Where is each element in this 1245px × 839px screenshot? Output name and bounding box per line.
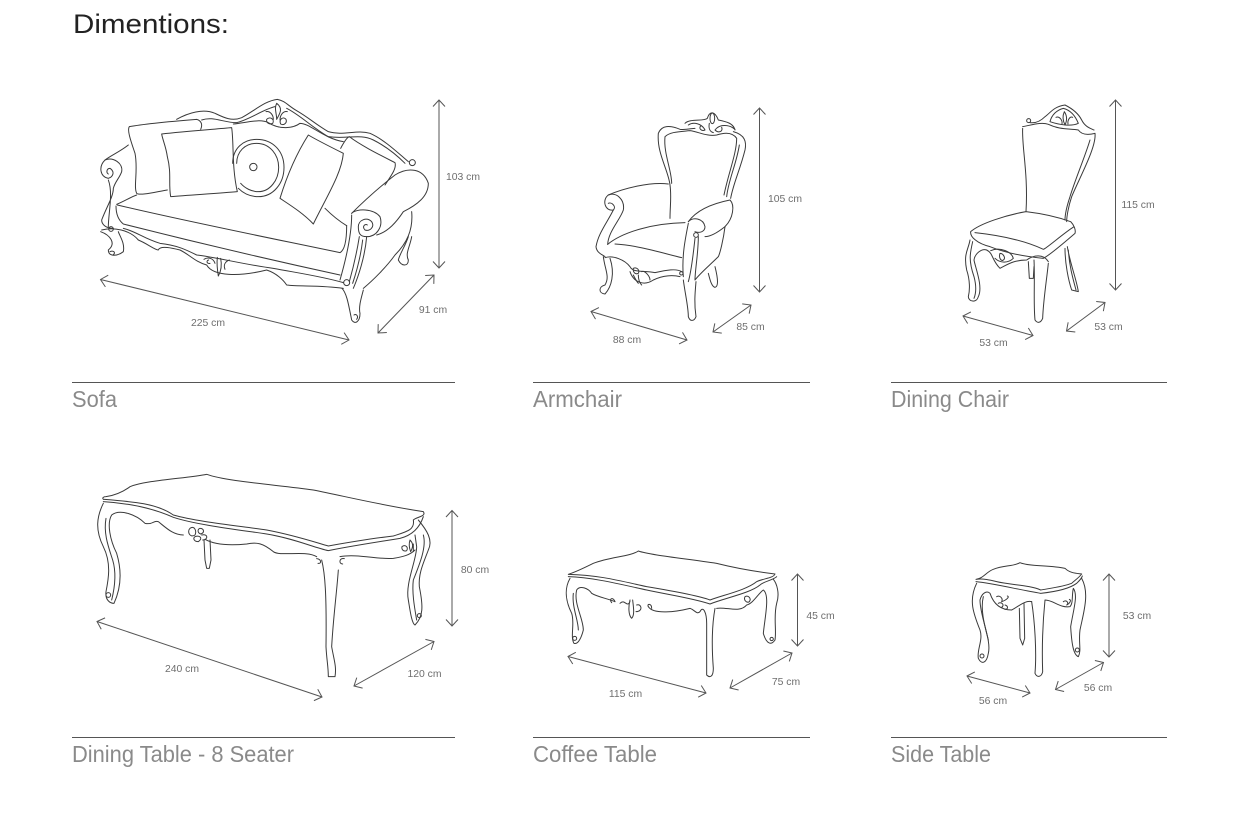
dimension: 53 cm: 53 cm: [1094, 322, 1123, 333]
dimension: 120 cm: 120 cm: [407, 669, 442, 680]
arrow: depth: [730, 653, 792, 688]
dimension: 105 cm: 105 cm: [768, 194, 802, 205]
arrow: width: [591, 312, 687, 340]
dimension: 53 cm: 53 cm: [979, 338, 1008, 349]
drawing: dining table: [98, 474, 430, 677]
title: Dimentions:: [73, 9, 229, 39]
divider and label: Armchair: Armchair: [533, 386, 622, 412]
arrow: depth: [378, 275, 434, 333]
arrow: height: [451, 510, 453, 626]
drawing: sofa: [101, 99, 428, 322]
panel: side table: [891, 563, 1167, 767]
arrow: depth: [713, 305, 751, 332]
dimension: 80 cm: 80 cm: [461, 565, 489, 576]
dimension: 115 cm: 115 cm: [1121, 200, 1155, 211]
dimension: 88 cm: 88 cm: [613, 335, 641, 346]
dimension: 56 cm: 56 cm: [1084, 683, 1112, 694]
arrow: height: [796, 574, 798, 646]
arrow: width: [97, 622, 322, 697]
divider and label: Side Table: Side Table: [891, 741, 991, 767]
panel: armchair: [533, 108, 810, 412]
arrow: width: [967, 676, 1030, 693]
panel: coffee table: [533, 551, 835, 767]
dimension: 91 cm: 91 cm: [419, 305, 447, 316]
dimension: 53 cm: 53 cm: [1123, 611, 1151, 622]
drawing: coffee table: [566, 551, 778, 677]
drawing: side table: [972, 563, 1086, 676]
arrow: depth: [354, 642, 434, 686]
panel: sofa: [72, 99, 480, 412]
divider and label: Dining Table - 8 Seater: Dining Table - 8 Seater: [72, 741, 294, 767]
dimension: 56 cm: 56 cm: [979, 696, 1007, 707]
panel: dining table: [72, 474, 489, 767]
dimension: 85 cm: 85 cm: [736, 322, 765, 333]
arrow: height: [1114, 100, 1116, 290]
dimension: 75 cm: 75 cm: [772, 677, 800, 688]
dimension: 45 cm: 45 cm: [806, 611, 835, 622]
arrow: width: [568, 656, 706, 693]
arrow: depth: [1056, 662, 1104, 690]
arrow: height: [438, 100, 440, 268]
divider and label: Sofa: Sofa: [72, 386, 117, 412]
arrow: height: [1108, 574, 1110, 657]
dimension: 103 cm: 103 cm: [446, 172, 480, 183]
dimension: 240 cm: 240 cm: [165, 664, 199, 675]
divider and label: Coffee Table: Coffee Table: [533, 741, 657, 767]
dimension: 225 cm: 225 cm: [191, 318, 225, 329]
panel: dining chair: [891, 100, 1167, 412]
dimension: 115 cm: 115 cm: [609, 689, 642, 700]
arrow: width: [963, 316, 1033, 336]
drawing: armchair: [596, 113, 746, 320]
arrow: depth: [1066, 302, 1105, 331]
drawing: dining chair: [966, 105, 1095, 322]
arrow: width: [100, 280, 349, 340]
divider and label: Dining Chair: Dining Chair: [891, 386, 1009, 412]
arrow: height: [758, 108, 760, 292]
